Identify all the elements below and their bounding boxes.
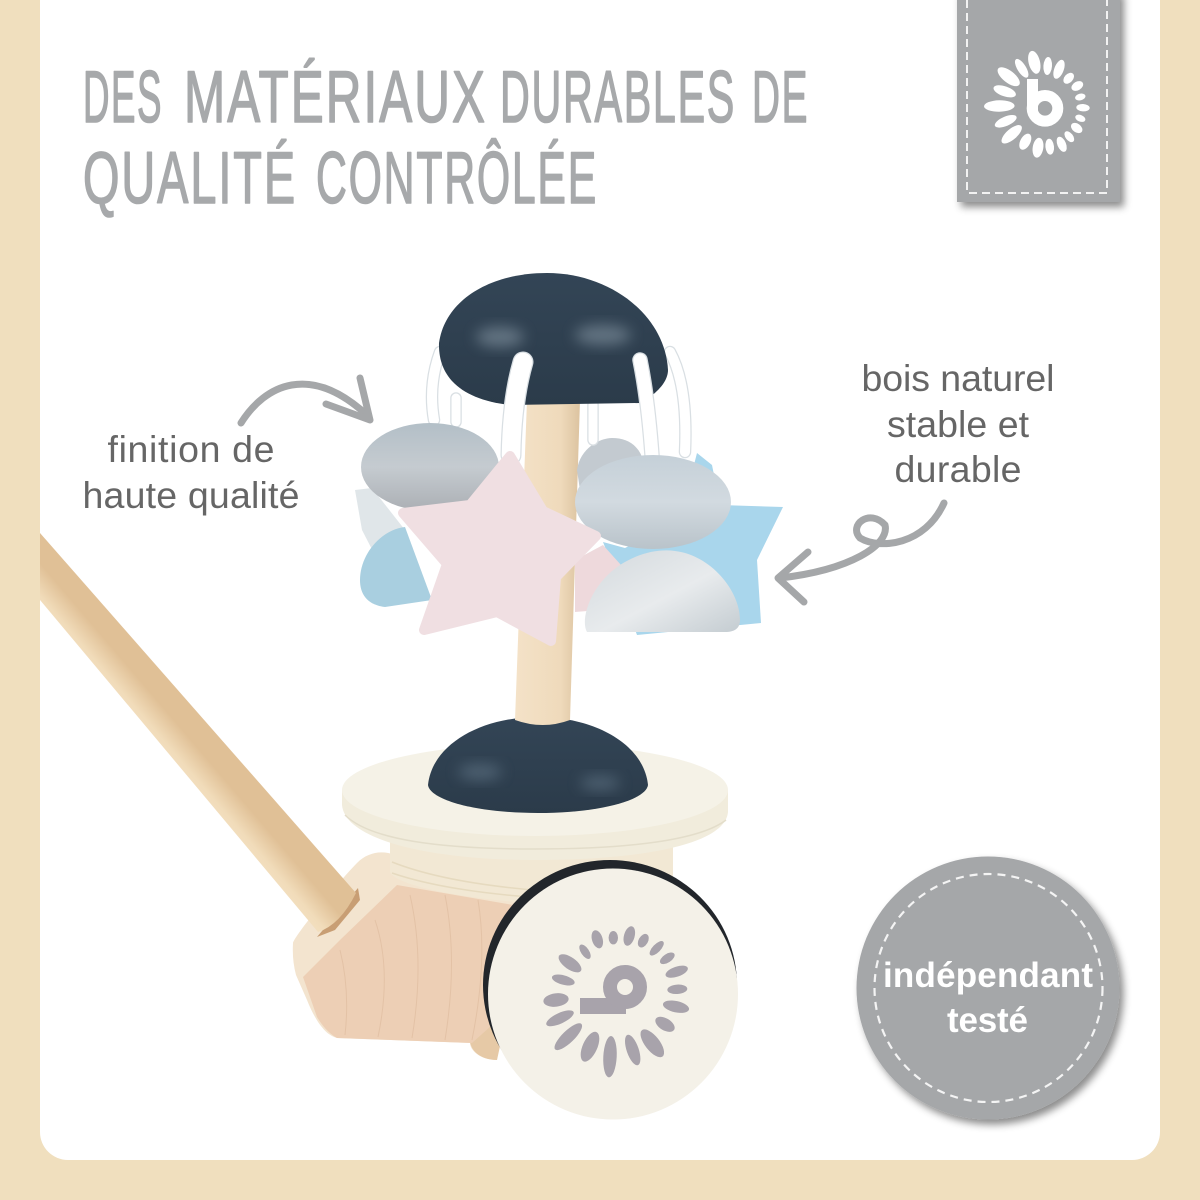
text: finition de haute qualité: finition de: [108, 428, 274, 470]
title: QUALITÉ: [83, 138, 297, 219]
product: strings: [432, 352, 685, 452]
product: lower dome: [428, 717, 648, 813]
product: plywood cylinder: [390, 840, 673, 905]
arrow: to top bead: [241, 378, 370, 423]
text: bois naturel stable et durable: durable: [894, 448, 1022, 490]
text: finition de haute qualité: [82, 428, 300, 516]
product: pink star: [403, 456, 596, 641]
product: round disc: [342, 744, 728, 860]
icon: wheel logo: [543, 925, 690, 1078]
title: [83, 57, 809, 219]
text: finition de haute qualité: haute qualité: [82, 474, 300, 516]
product: wheel: [483, 860, 738, 1120]
brand tag: [957, 0, 1120, 202]
title: DES: [83, 57, 163, 138]
text: bois naturel stable et durable: [862, 357, 1054, 490]
title: DE: [752, 57, 809, 138]
title: CONTRÔLÉE: [316, 138, 598, 219]
arrow: to blue star: [778, 503, 944, 602]
product: push pole: [40, 533, 356, 932]
badge: independent tested: testé: [947, 1001, 1028, 1040]
product: wooden block: [293, 852, 520, 1060]
text: bois naturel stable et durable: stable et: [887, 403, 1030, 445]
badge: independent tested: [856, 856, 1120, 1120]
product: stem: [515, 400, 580, 725]
front loop string: [511, 362, 523, 455]
product: back beads and stars: [355, 438, 783, 635]
title: DURABLES: [500, 57, 736, 138]
product: top dome: [439, 273, 668, 405]
icon: brand sunflower logo: [984, 50, 1090, 158]
product: front beads: [361, 360, 740, 632]
text: bois naturel stable et durable: bois naturel: [862, 357, 1054, 399]
badge: independent tested: indépendant: [883, 956, 1093, 995]
title: MATÉRIAUX: [184, 57, 487, 138]
